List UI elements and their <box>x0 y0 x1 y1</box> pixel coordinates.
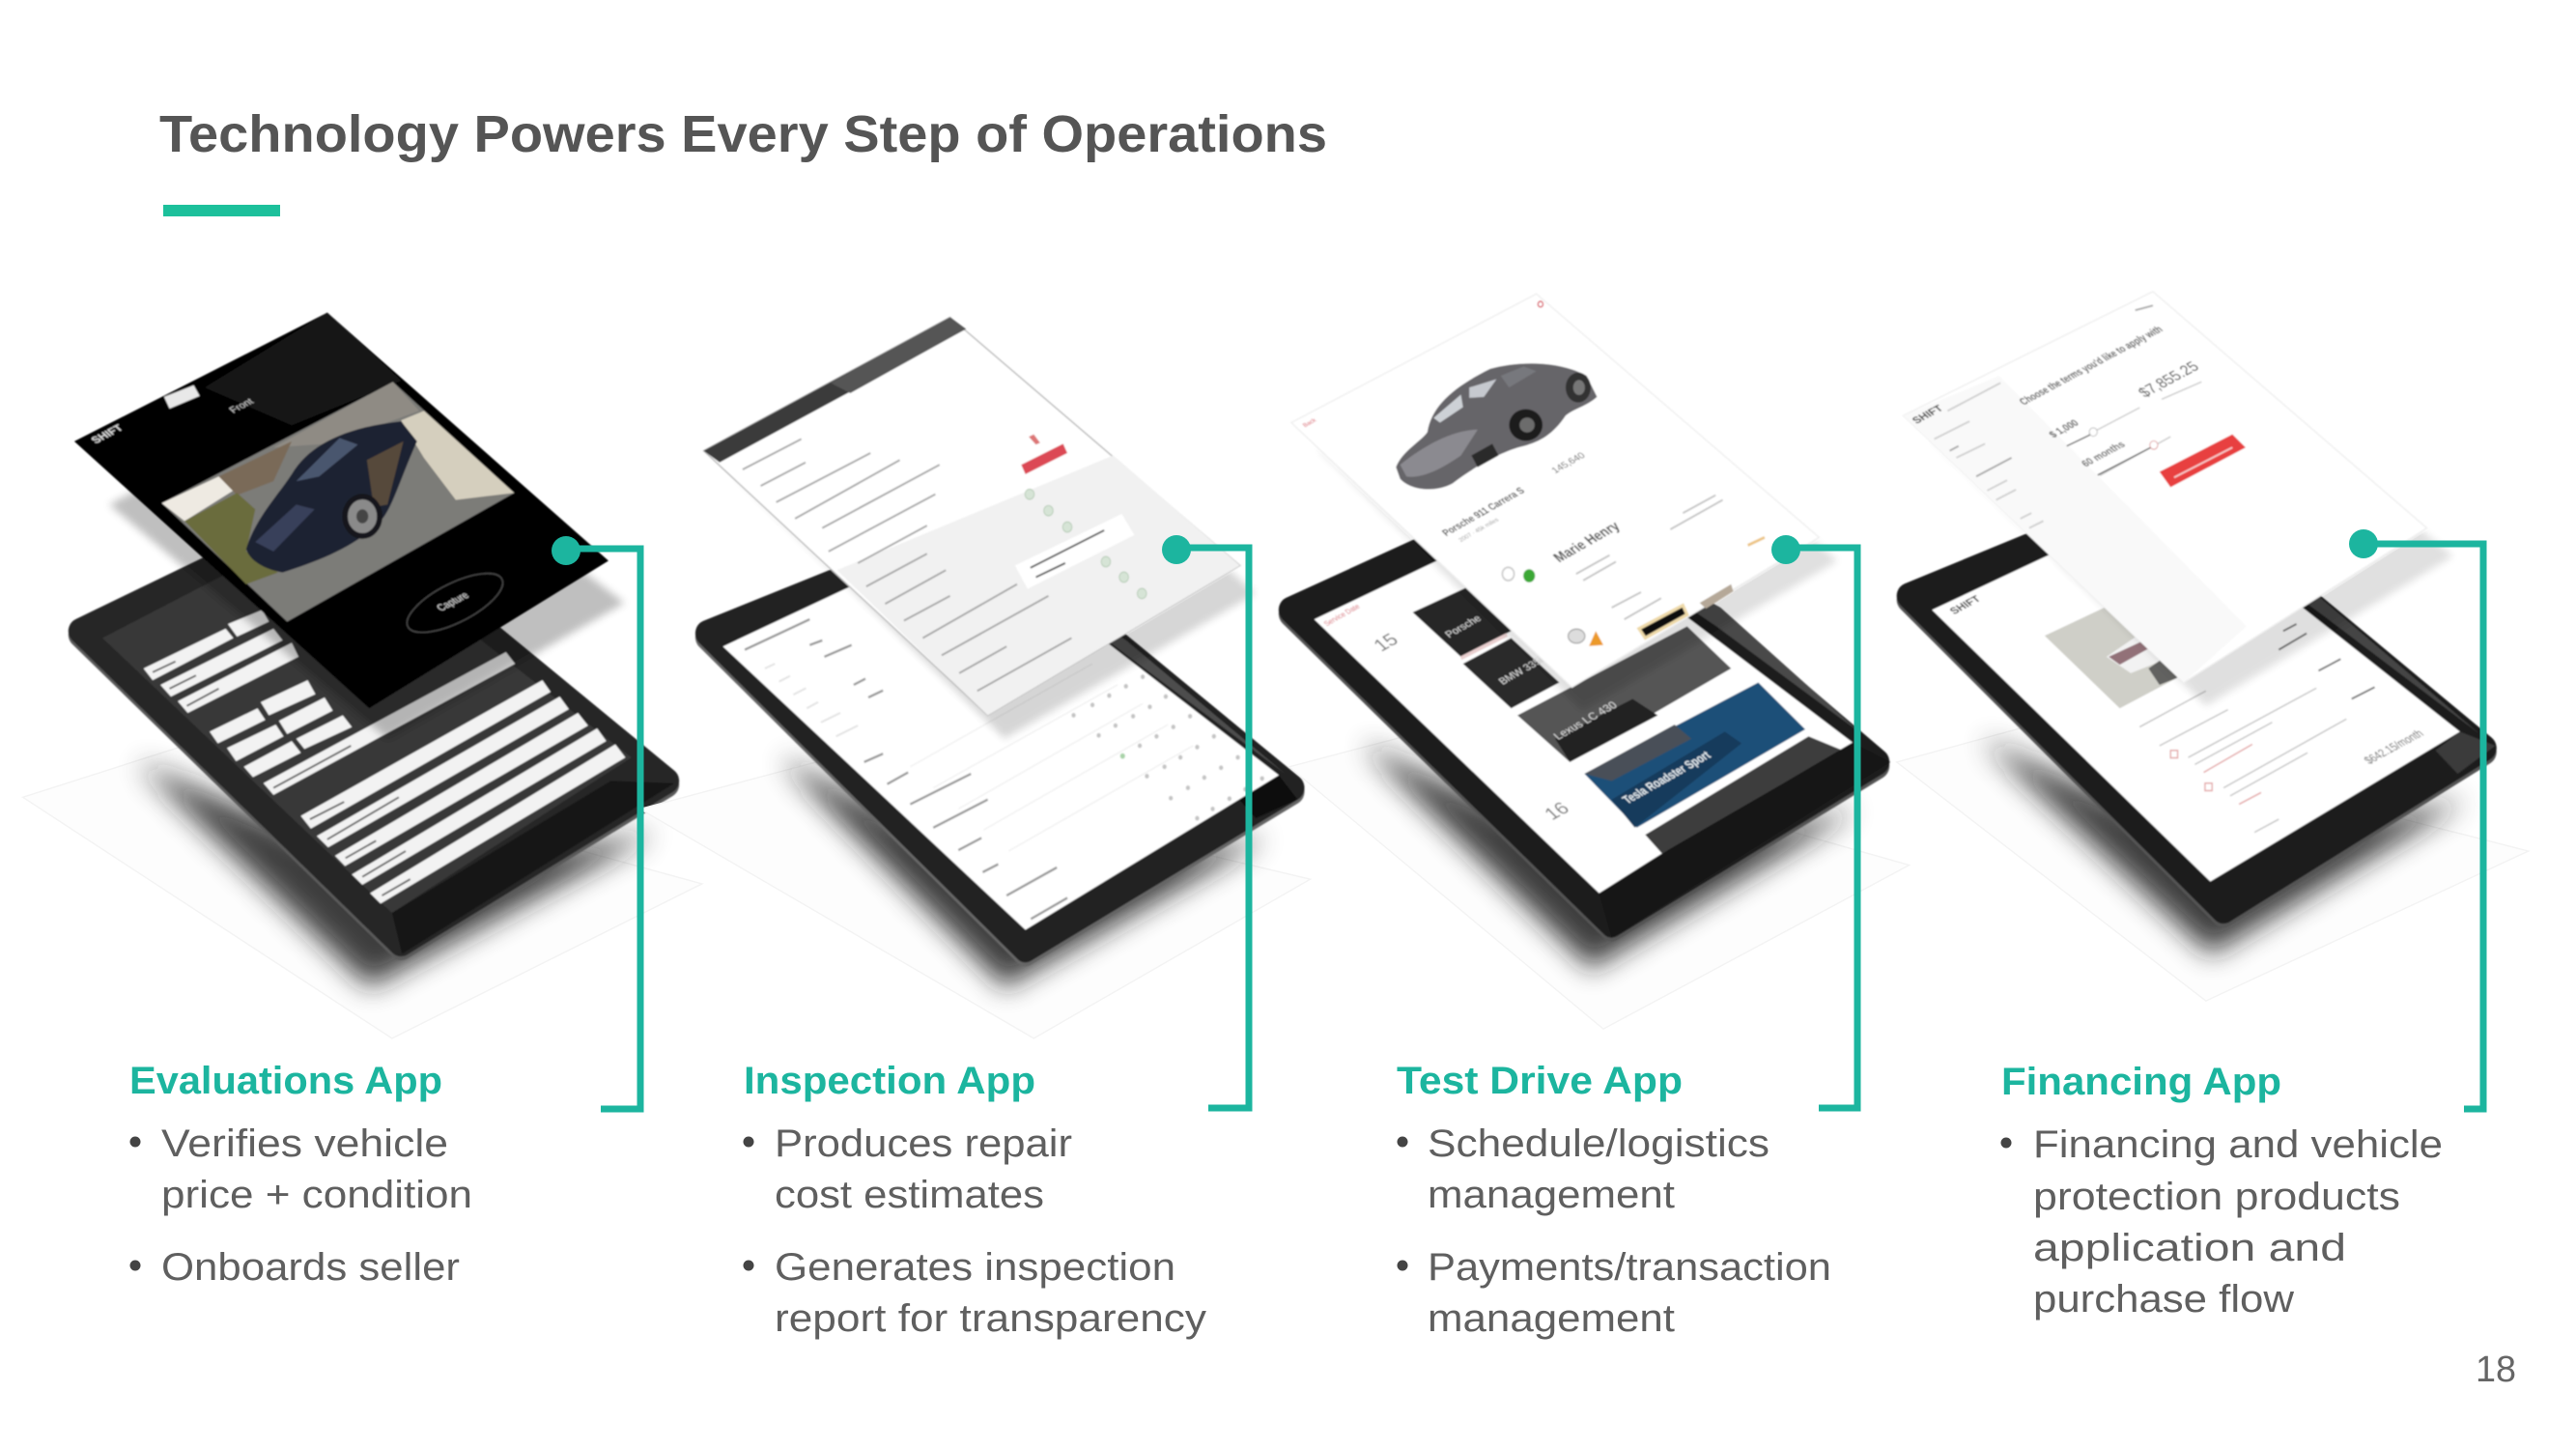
panel: test drive tablet illustration: 15 <box>1370 630 1403 656</box>
connector: test drive <box>1771 535 1857 1108</box>
floating screen: financing terms: SHIFT <box>1911 404 1946 426</box>
text block: test drive app: Test Drive App <box>1397 1060 1683 1102</box>
floating screen: vehicle details: 145,640 <box>1549 451 1588 475</box>
text block: inspection app: cost estimates <box>775 1174 1044 1216</box>
floating screen: financing terms: Choose the terms you'd like to apply with <box>2017 324 2166 408</box>
text block: financing app: Financing and vehicle <box>2033 1123 2443 1166</box>
car photo <box>162 382 514 622</box>
panel: test drive tablet illustration: Tesla Roadster Sport <box>1619 749 1713 807</box>
floating screen: vehicle details: Porsche 911 Carrera S <box>1440 486 1527 538</box>
text block: evaluations app <box>129 1060 472 1289</box>
tablet body <box>1290 492 1878 928</box>
tablet body <box>1910 492 2484 914</box>
capture button <box>399 561 510 644</box>
inspection rows <box>745 619 883 697</box>
text block: financing app: Financing App <box>2001 1061 2281 1103</box>
floating screen: capture: SHIFT <box>89 423 126 445</box>
text block: financing app <box>2001 1061 2443 1321</box>
text block: evaluations app: Evaluations App <box>129 1060 442 1102</box>
text block: inspection app: report for transparency <box>775 1297 1206 1340</box>
panel: test drive tablet illustration: 16 <box>1541 799 1574 824</box>
summary content <box>2045 608 2177 708</box>
floating screen: financing terms: $7,855.25 <box>2135 358 2203 401</box>
text block: evaluations app: Verifies vehicle <box>161 1122 448 1165</box>
continue button <box>2160 435 2246 487</box>
floating screen: vehicle details: Back <box>1302 417 1318 429</box>
text block: test drive app: Payments/transaction <box>1428 1246 1831 1289</box>
text block: inspection app: Inspection App <box>744 1060 1035 1102</box>
panel: test drive tablet illustration <box>1289 294 1910 1029</box>
text block: financing app: purchase flow <box>2033 1278 2294 1321</box>
panel: financing tablet illustration: $642.15/month <box>2361 727 2426 766</box>
title: Technology Powers Every Step of Operations <box>159 105 1327 163</box>
text block: financing app: application and <box>2033 1227 2346 1269</box>
floating screen: vehicle details: 2007 · 45k miles <box>1458 517 1501 544</box>
floating screen: financing terms <box>1904 292 2453 706</box>
text block: financing app: protection products <box>2033 1176 2400 1218</box>
panel: financing tablet illustration <box>1897 292 2529 1001</box>
connector: inspection <box>1162 535 1249 1108</box>
panel: evaluations tablet illustration <box>23 313 702 1038</box>
panel: inspection tablet illustration <box>640 317 1311 1038</box>
form fields <box>144 610 625 903</box>
panel: test drive tablet illustration: Lexus LC 430 <box>1551 699 1621 742</box>
panel: test drive tablet illustration: Service Date <box>1322 603 1362 628</box>
tablet body <box>707 529 1292 953</box>
text block: inspection app: Produces repair <box>775 1122 1072 1165</box>
floating screen: capture: Capture <box>435 591 471 613</box>
text block: evaluations app: Onboards seller <box>161 1246 460 1289</box>
tablet body <box>81 512 666 947</box>
text block: test drive app: management <box>1428 1297 1675 1340</box>
car <box>1396 363 1597 490</box>
panel: test drive tablet illustration: BMW 335i <box>1496 655 1546 687</box>
floating screen: checklist <box>704 317 1256 739</box>
title accent bar <box>163 205 280 216</box>
text block: inspection app: Generates inspection <box>775 1246 1175 1289</box>
text block: test drive app <box>1397 1060 1831 1340</box>
floating screen: financing terms: $ 1,000 <box>2047 418 2081 440</box>
floating screen: vehicle details <box>1291 294 1838 711</box>
floating screen: vehicle details: Marie Henry <box>1550 519 1624 565</box>
text block: test drive app: management <box>1428 1174 1675 1216</box>
floating screen: financing terms: 60 months <box>2080 440 2128 469</box>
panel: financing tablet illustration: SHIFT <box>1948 594 1984 616</box>
page number: 18 <box>2476 1350 2516 1390</box>
floating screen: capture <box>74 313 625 739</box>
floating screen: capture: Front <box>228 397 256 415</box>
calendar cards <box>1413 584 1512 657</box>
text block: inspection app <box>744 1060 1206 1340</box>
icons <box>1502 567 1514 581</box>
text block: evaluations app: price + condition <box>161 1174 472 1216</box>
connector: financing <box>2349 529 2483 1109</box>
text block: test drive app: Schedule/logistics <box>1428 1122 1769 1165</box>
connector: evaluations <box>552 536 640 1109</box>
panel: test drive tablet illustration: Porsche <box>1443 613 1484 640</box>
